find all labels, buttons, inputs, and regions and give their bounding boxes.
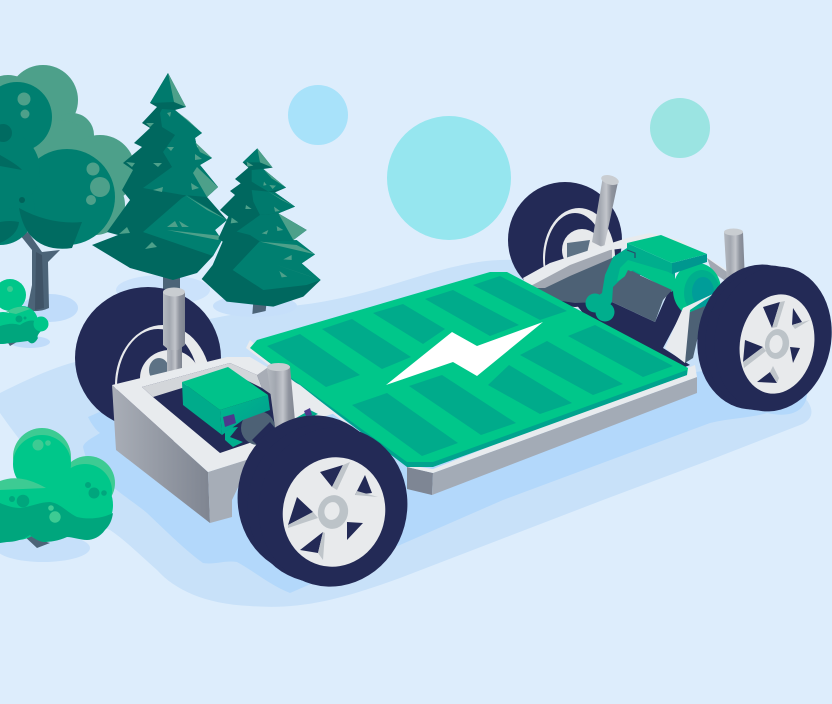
decorative circle: right	[650, 98, 710, 158]
post: rear left	[163, 288, 185, 372]
chassis base side	[246, 340, 697, 495]
ground shadow: dark	[83, 360, 807, 593]
battery cells	[267, 276, 673, 456]
lightning bolt	[386, 322, 543, 385]
post: rear right front	[724, 228, 745, 282]
wheel hubcap: front right	[732, 288, 822, 400]
ground shadow: light	[0, 260, 811, 607]
broadleaf tree	[0, 65, 135, 322]
wheel: front left	[220, 399, 425, 603]
rear right chassis frame	[523, 233, 727, 385]
small pine tree	[202, 148, 321, 314]
decorative circle: left	[288, 85, 348, 145]
pine tree shadow	[116, 275, 210, 305]
wheel hubcap: front left	[271, 446, 397, 578]
small pine shadow	[213, 295, 297, 317]
front motor assembly	[182, 367, 318, 448]
wheel: rear right (far)	[508, 182, 622, 308]
post: front left	[267, 363, 296, 442]
battery pack	[250, 272, 688, 467]
rear motor assembly	[586, 235, 721, 322]
decorative circle: centre	[387, 116, 511, 240]
rear right arm	[665, 293, 715, 363]
small bush: upper left	[0, 279, 50, 348]
wheel: rear left (far)	[75, 287, 221, 445]
post: rear right	[592, 173, 620, 248]
big pine tree	[92, 73, 227, 292]
wheel: front right	[684, 253, 832, 422]
front left chassis frame	[112, 357, 335, 523]
green bush: lower left	[0, 428, 115, 562]
